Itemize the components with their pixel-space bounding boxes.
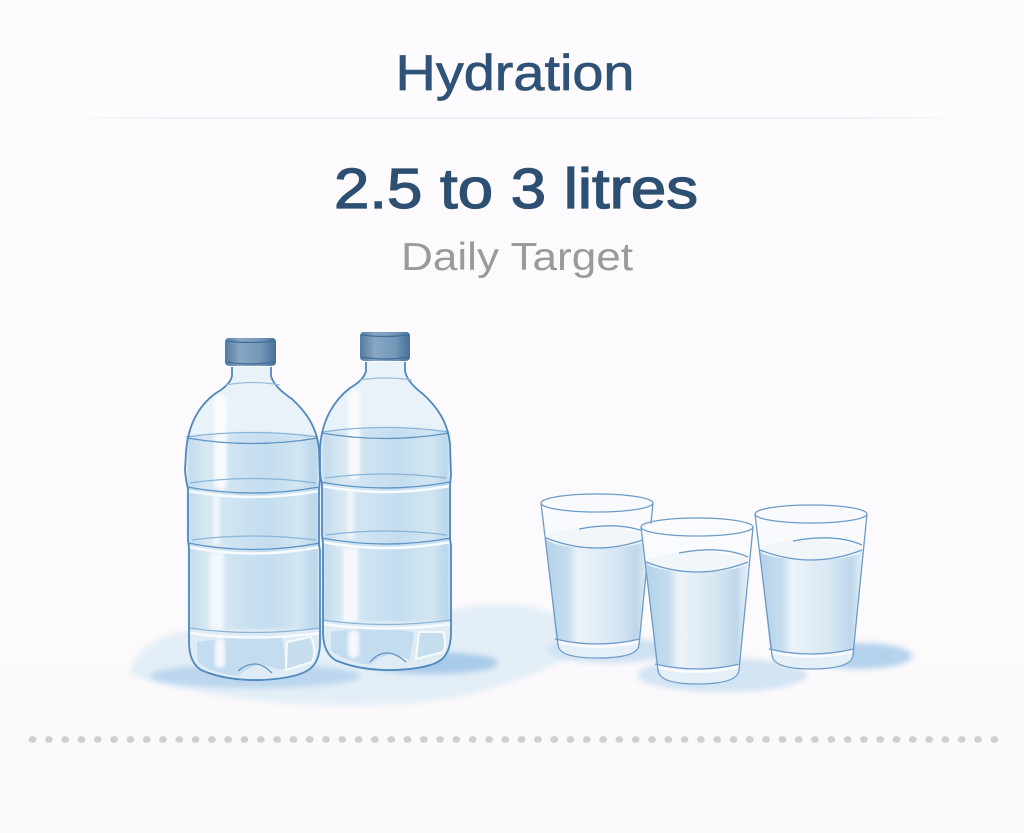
subtitle: daily target: Daily Target [401,236,633,279]
white rib reflections [188,491,320,638]
glass body [755,505,867,669]
outlines [641,518,753,684]
water [759,544,863,654]
bottle body [185,367,320,680]
glass body [641,517,753,684]
highlights [210,395,227,668]
water [646,556,748,669]
title: Hydration [396,45,634,101]
glass right [755,505,867,669]
bottle right [320,332,451,670]
water [187,432,319,630]
divider [50,117,980,119]
rib bands and outline [185,367,320,680]
bottle left [185,338,320,680]
glass base tint [556,643,639,658]
glass base tint [770,653,853,669]
base [323,622,451,670]
water [545,532,649,644]
main figure: 2.5 to 3 litres: 2.5 to 3 litres [334,157,698,221]
bottle body [320,362,451,670]
glass base tint [656,668,739,684]
highlights [343,390,360,658]
glass body [541,493,653,658]
white rib reflections [321,486,451,628]
bottle cap [360,332,410,361]
bottle cap [225,338,276,366]
glass centre [641,517,753,684]
dotted line [32,736,996,743]
watercolour shadows under the bottles and glasses [130,604,912,705]
rib bands and outline [320,362,451,670]
outlines [755,505,867,669]
water [322,428,450,622]
glass left [541,493,653,658]
outlines [541,494,653,658]
base [189,630,320,680]
